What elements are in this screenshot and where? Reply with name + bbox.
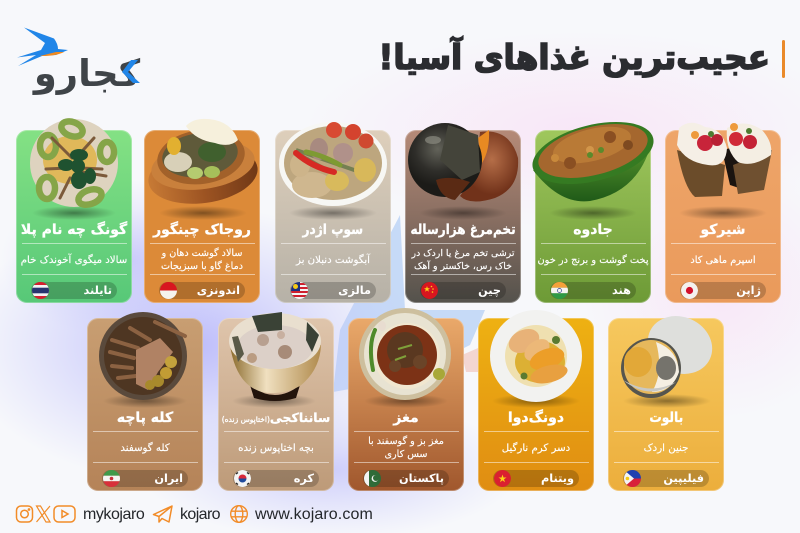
- country pill: Malaysia: [290, 282, 376, 299]
- description: بچه اختاپوس زنده: [238, 442, 314, 454]
- food: jadoh: [532, 122, 654, 219]
- country pill: Japan: ژاپن: [736, 284, 761, 297]
- dish name: تخم‌مرغ هزارساله: [410, 222, 516, 238]
- country pill: Japan: [680, 282, 766, 299]
- dish name: مغز: [393, 410, 419, 426]
- country pill: India: [550, 282, 636, 299]
- dish name: شیرکو: [700, 222, 746, 238]
- title: عجیب‌ترین غذاهای آسیا!: [378, 38, 770, 78]
- food: balut: [621, 316, 712, 408]
- description: [368, 435, 444, 460]
- card: Thailand: [16, 118, 132, 303]
- description: سالاد گوشت دهان و: [162, 248, 242, 259]
- description: ترشی تخم مرغ یا اردک در: [412, 248, 514, 259]
- card: Japan: [665, 122, 781, 303]
- country pill: Philippines: فیلیپین: [663, 472, 704, 485]
- icons: instagram, x, youtube: [16, 505, 76, 523]
- handle: mykojaro: [83, 506, 144, 523]
- handle: kojaro: [180, 506, 220, 523]
- country pill: Thailand: تایلند: [84, 284, 112, 297]
- logo: kojaro: [17, 28, 140, 95]
- dish name: گونگ چه نام پلا: [21, 222, 127, 238]
- dish name: سوپ اژدر: [303, 222, 363, 238]
- card: China: [405, 123, 521, 303]
- card: Pakistan: [348, 308, 464, 491]
- country pill: Indonesia: [159, 282, 245, 299]
- dish name: روجاک چینگور: [153, 222, 251, 238]
- dish name: سانناکجی(اختاپوس زنده): [222, 410, 330, 425]
- country pill: Malaysia: مالزی: [338, 284, 371, 297]
- food: kaleh pacheh: [99, 312, 187, 408]
- country pill: Iran: [102, 470, 188, 487]
- food: shirako sushi: [677, 122, 772, 220]
- dish name: دونگ‌دوا: [508, 410, 564, 426]
- description: دسر کرم نارگیل: [502, 442, 570, 454]
- country pill: Korea: کره: [294, 472, 314, 485]
- description: پخت گوشت و برنج در خون: [537, 254, 649, 266]
- country pill: Philippines: [623, 470, 709, 487]
- dish name: بالوت: [649, 410, 683, 426]
- icon: telegram: [152, 505, 173, 523]
- icon: swallow bird: [17, 28, 68, 66]
- card: Philippines: [608, 316, 724, 491]
- description: آبگوشت دنبلان بز: [296, 254, 370, 266]
- food: soup azhdar: [279, 122, 387, 220]
- food: rujak cingur: [148, 119, 258, 220]
- country pill: India: هند: [612, 284, 631, 297]
- card: Vietnam: [478, 310, 594, 491]
- logo wordmark: کجارو: [34, 52, 140, 95]
- food: sannakji: [229, 312, 321, 408]
- description: دماغ گاو با سبزیجات: [161, 261, 243, 272]
- icon: globe: [230, 505, 248, 523]
- description: سالاد میگوی آخوندک خام: [21, 254, 127, 266]
- country pill: Indonesia: اندونزی: [197, 284, 240, 297]
- description: [411, 248, 514, 272]
- dish name: جادوه: [573, 222, 613, 238]
- card: Korea: [218, 312, 334, 491]
- description: اسپرم ماهی کاد: [690, 254, 756, 266]
- description: جنین اردک: [644, 442, 688, 454]
- country pill: Korea: [233, 470, 319, 487]
- card: Malaysia: [275, 122, 391, 303]
- food: maghaz: [359, 308, 451, 408]
- country pill: China: چین: [478, 284, 501, 297]
- card: Iran: [87, 312, 203, 491]
- dish name: کله پاچه: [117, 410, 173, 426]
- country pill: Vietnam: ویتنام: [541, 472, 574, 485]
- country pill: Iran: ایران: [154, 472, 183, 485]
- website: www.kojaro.com: [255, 506, 373, 523]
- country pill: China: [420, 282, 506, 299]
- footer: social links: [16, 505, 373, 523]
- country pill: Thailand: [31, 282, 117, 299]
- food: goong chae nam pla: [30, 118, 118, 220]
- country pill: Vietnam: [493, 470, 579, 487]
- country pill: Pakistan: [363, 470, 449, 487]
- food: duong dua: [490, 310, 582, 408]
- description: کله گوسفند: [120, 442, 170, 454]
- description: [161, 247, 243, 272]
- logo chevron accent: [122, 60, 140, 83]
- title accent bar: [782, 40, 785, 78]
- food: century egg: [408, 123, 518, 219]
- description: مغز بز و گوسفند با: [368, 436, 444, 447]
- card: India: [532, 122, 654, 303]
- description: سس کاری: [385, 449, 427, 460]
- card: Indonesia: [144, 119, 260, 303]
- country pill: Pakistan: پاکستان: [399, 472, 444, 485]
- description: خاک رس، خاکستر و آهک: [414, 261, 512, 272]
